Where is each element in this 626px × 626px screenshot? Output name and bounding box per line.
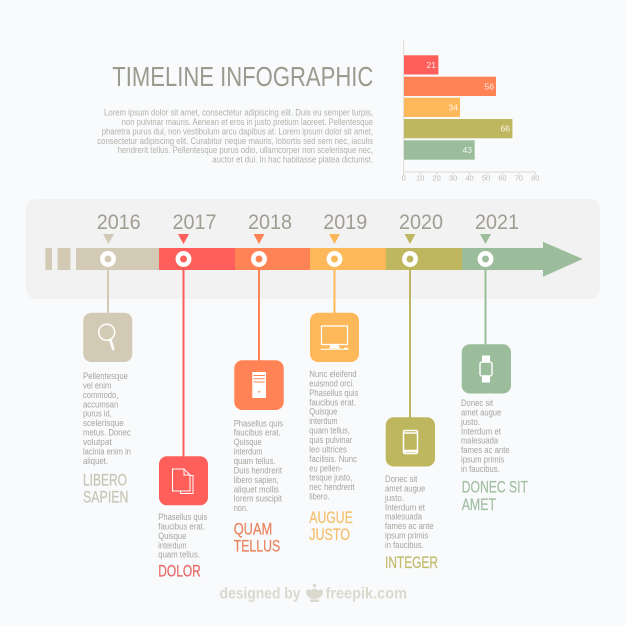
- icon: smartwatch: [480, 356, 492, 382]
- panel: 2020 integer: fames ac ante: [385, 521, 434, 531]
- panel: 2017 dolor: [158, 456, 208, 580]
- panel: 2018 quam tellus: TELLUS: [234, 537, 280, 555]
- panel: 2021 donec sit amet: fames ac ante: [461, 445, 510, 455]
- bar chart: 10: [416, 174, 424, 182]
- bar chart: [402, 40, 539, 182]
- panel: 2018 quam tellus: Duis hendrerit: [234, 466, 282, 476]
- panel: 2018 quam tellus: lorem suscipit: [234, 494, 282, 504]
- footer credit: [220, 584, 407, 602]
- icon: magnifier: [99, 324, 115, 350]
- panel: 2019 augue justo: nec hendrerit: [309, 482, 355, 492]
- panel: 2020 integer: Interdum et: [385, 502, 425, 512]
- panel: 2018 quam tellus: Quisque: [234, 437, 262, 447]
- icon: documents: [172, 469, 193, 494]
- icon: desktop monitor: [320, 326, 348, 349]
- intro paragraph: hendrerit tellus. Pellentesque purus odio, ullamcorper non scelerisque nec,: [118, 145, 373, 155]
- panel: 2019 augue justo: Quisque: [309, 407, 337, 417]
- panel: 2019 augue justo: euismod orci.: [309, 378, 354, 388]
- bar chart: 50: [482, 174, 490, 182]
- panel: 2018 quam tellus: faucibus erat.: [234, 428, 281, 438]
- panel: 2021 donec sit amet: [460, 344, 528, 514]
- bar chart: 70: [515, 174, 523, 182]
- panel: 2016 libero sapien: volutpat: [83, 437, 112, 447]
- panel: 2020 integer: in faucibus.: [385, 540, 424, 550]
- bar chart: 43: [463, 145, 472, 155]
- timeline nodes: [102, 253, 491, 265]
- panel: 2016 libero sapien: lacinia enim in: [83, 446, 131, 456]
- panel: 2018 quam tellus: quam tellus.: [234, 456, 276, 466]
- bar chart: 40: [465, 174, 474, 182]
- year markers: 2021: [475, 211, 519, 234]
- panel: 2017 dolor: Quisque: [158, 531, 186, 541]
- footer credit: designed by: [220, 586, 301, 602]
- panel: 2021 donec sit amet: malesuada: [461, 436, 498, 446]
- panel: 2020 integer: malesuada: [385, 512, 422, 522]
- panel: 2017 dolor: interdum: [158, 540, 187, 550]
- panel: 2016 libero sapien: purus id,: [83, 409, 112, 419]
- timeline arrow: [45, 242, 583, 277]
- panel: 2021 donec sit amet: amet augue: [461, 407, 501, 417]
- panel: 2019 augue justo: faucibus erat.: [309, 397, 356, 407]
- panel: 2016 libero sapien: aliquet.: [83, 456, 108, 466]
- panel: 2019 augue justo: quam tellus,: [309, 426, 350, 436]
- year markers: 2017: [172, 211, 216, 234]
- panel: 2021 donec sit amet: in faucibus.: [461, 464, 500, 474]
- panel: 2018 quam tellus: Phasellus quis: [234, 418, 284, 428]
- icon: computer tower: [252, 372, 266, 398]
- bar chart: 0: [402, 174, 406, 182]
- connector lines: [108, 270, 486, 457]
- year markers: 2019: [323, 211, 367, 234]
- panel: 2020 integer: INTEGER: [385, 554, 438, 572]
- icon: smartphone: [404, 430, 418, 454]
- panel: 2019 augue justo: [309, 313, 359, 544]
- icon: freepik crown: [306, 584, 323, 602]
- panel: 2018 quam tellus: QUAM: [234, 521, 272, 539]
- panel: 2021 donec sit amet: Interdum et: [461, 426, 501, 436]
- panel: 2019 augue justo: quis pulvinar: [309, 435, 352, 445]
- panel: 2018 quam tellus: non.: [234, 503, 248, 513]
- panel: 2018 quam tellus: interdum: [234, 447, 262, 457]
- panel: 2021 donec sit amet: DONEC SIT: [462, 478, 528, 496]
- panel: 2017 dolor: quam tellus.: [158, 550, 200, 560]
- panel: 2019 augue justo: Phasellus quis: [309, 388, 359, 398]
- panel: 2016 libero sapien: accumsan: [83, 399, 118, 409]
- bar chart: 34: [449, 102, 458, 112]
- panel: 2018 quam tellus: libero sapien,: [234, 475, 279, 485]
- intro paragraph: non pulvinar mauris. Aenean et eros in justo pretium laoreet. Pellentesque: [122, 117, 373, 127]
- panel: 2016 libero sapien: vel enim: [83, 380, 111, 390]
- year markers: 2016: [97, 211, 141, 234]
- footer credit: freepik.com: [326, 586, 407, 602]
- year markers: [97, 211, 519, 244]
- panel: 2016 libero sapien: commodo,: [83, 390, 118, 400]
- bar chart: 20: [432, 174, 441, 182]
- title: TIMELINE INFOGRAPHIC: [112, 61, 373, 92]
- panel: 2019 augue justo: JUSTO: [309, 526, 350, 544]
- panel: 2019 augue justo: Nunc eleifend: [309, 369, 357, 379]
- panel: 2019 augue justo: AUGUE: [309, 509, 353, 527]
- panel: 2017 dolor: Phasellus quis: [158, 512, 208, 522]
- panel: 2021 donec sit amet: Donec sit: [461, 398, 493, 408]
- panel: 2021 donec sit amet: justo.: [460, 417, 480, 427]
- intro paragraph: auctor et dui. In hac habitasse platea dictumst.: [212, 155, 373, 165]
- year markers: 2020: [399, 211, 443, 234]
- panel: 2016 libero sapien: metus. Donec: [83, 428, 131, 438]
- panel: 2020 integer: [384, 417, 438, 572]
- panel: 2021 donec sit amet: ipsum primis: [461, 455, 505, 465]
- panel: 2020 integer: Donec sit: [385, 474, 418, 484]
- bar chart: 56: [485, 82, 494, 92]
- panel: 2019 augue justo: eu pellen-: [309, 463, 342, 473]
- year markers: 2018: [248, 211, 292, 234]
- panel: 2019 augue justo: leo ultrices: [309, 444, 348, 454]
- bar chart: 66: [501, 124, 510, 134]
- panel: timeline band: [26, 199, 600, 299]
- bar chart: 60: [498, 174, 507, 182]
- panel: 2016 libero sapien: LIBERO: [83, 472, 127, 490]
- panel: 2019 augue justo: tesque justo,: [309, 473, 352, 483]
- intro paragraph: consectetur adipiscing elit. Curabitur neque mauris, lobortis sed sem nec, iaculis: [97, 136, 374, 146]
- panel: 2020 integer: amet augue: [385, 483, 425, 493]
- bar chart: 21: [427, 60, 436, 70]
- bar chart: 30: [449, 174, 457, 182]
- panel: 2017 dolor: faucibus erat.: [158, 521, 205, 531]
- intro paragraph: Lorem ipsum dolor sit amet, consectetur adipiscing elit. Duis eu semper turpis,: [104, 108, 373, 118]
- panel: 2020 integer: justo.: [384, 493, 404, 503]
- bar chart: 80: [531, 174, 539, 182]
- panel: 2018 quam tellus: aliquet mollis: [234, 484, 280, 494]
- panel: 2021 donec sit amet: AMET: [462, 496, 496, 514]
- panel: 2019 augue justo: interdum: [309, 416, 338, 426]
- intro paragraph: pharetra purus dui, non vestibulum arcu dapibus at. Lorem ipsum dolor sit amet,: [102, 126, 373, 136]
- panel: 2016 libero sapien: SAPIEN: [83, 488, 128, 506]
- panel: 2016 libero sapien: Pellentesque: [83, 371, 128, 381]
- panel: 2020 integer: ipsum primis: [385, 531, 429, 541]
- panel: 2019 augue justo: libero.: [309, 492, 330, 502]
- panel: 2018 quam tellus: [234, 360, 284, 555]
- panel: 2016 libero sapien: [83, 313, 132, 506]
- panel: 2019 augue justo: facilisis. Nunc: [309, 454, 358, 464]
- panel: 2017 dolor: DOLOR: [158, 562, 201, 580]
- panel: 2016 libero sapien: scelerisque: [83, 418, 124, 428]
- intro paragraph: [97, 108, 374, 165]
